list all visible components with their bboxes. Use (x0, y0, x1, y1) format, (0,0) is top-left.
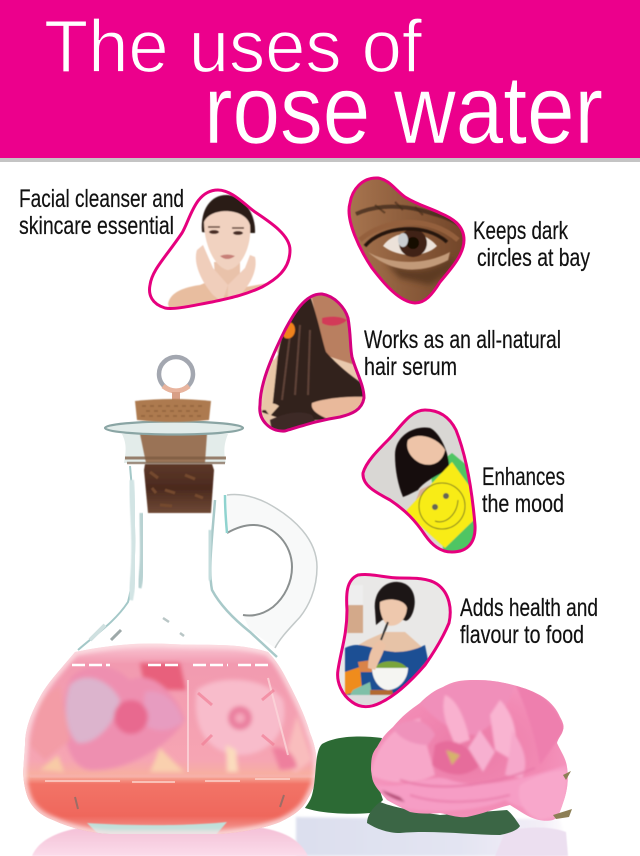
bottle lip (105, 422, 243, 463)
blob outline (260, 294, 364, 431)
label: Adds health and (460, 594, 598, 622)
bottle neck and shoulders (78, 465, 277, 657)
panel: mood: the mood (482, 490, 564, 518)
panel: facial cleanser: skincare essential (19, 212, 174, 240)
panel: food: flavour to food (460, 621, 584, 649)
panel: dark circles: circles at bay (477, 244, 590, 272)
header band (0, 0, 640, 164)
title: The uses of (44, 5, 422, 88)
blob outline (150, 190, 290, 308)
panel: facial cleanser (19, 185, 295, 315)
stem (553, 771, 572, 819)
cork upper (135, 399, 211, 422)
mood photo (364, 412, 474, 550)
label: Facial cleanser and (19, 185, 184, 213)
hair photo (261, 296, 362, 430)
blob outline (338, 575, 450, 707)
table reflection (32, 817, 570, 856)
face photo (168, 194, 266, 307)
leaf left (305, 736, 383, 814)
panel: hair serum: hair serum (364, 353, 457, 381)
blob outline (363, 410, 475, 552)
rose (305, 675, 575, 835)
panel: food (335, 570, 598, 712)
handle (225, 494, 317, 648)
title (44, 5, 603, 164)
panel: mood (358, 405, 565, 560)
label: Enhances (482, 463, 565, 491)
cork lower (144, 464, 214, 513)
flower (371, 680, 568, 821)
panel: dark circles (345, 175, 590, 305)
panel: hair serum (255, 290, 561, 435)
bottle ring (159, 357, 193, 391)
liquid with petals (20, 640, 320, 840)
food photo (339, 576, 449, 706)
icon: rose water bottle (20, 357, 320, 840)
label: Keeps dark (473, 217, 568, 245)
leaf bottom (367, 802, 520, 835)
eye photo (350, 180, 462, 302)
blob outline (349, 178, 464, 303)
label: Works as an all-natural (364, 326, 561, 354)
